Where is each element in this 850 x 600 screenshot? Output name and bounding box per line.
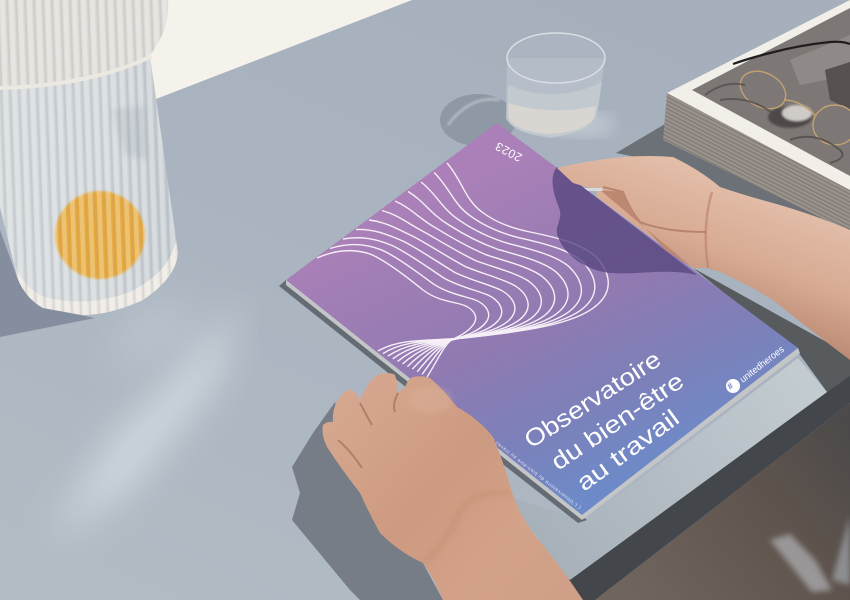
left lens xyxy=(734,64,792,116)
slit of light between fingers xyxy=(584,188,603,191)
year: 2023 xyxy=(493,139,524,165)
title line 1: Observatoire xyxy=(520,346,666,454)
lens shadow right xyxy=(790,137,842,163)
light reflection on table xyxy=(50,290,240,540)
title xyxy=(520,346,689,497)
page stack lines xyxy=(663,93,850,232)
eyeglasses xyxy=(705,42,850,163)
shadow beside book xyxy=(616,124,850,260)
shadow highlights xyxy=(448,99,500,125)
wrist shading xyxy=(423,493,512,563)
logo xyxy=(725,344,787,393)
jar lower body xyxy=(0,56,178,315)
jar rim xyxy=(0,56,152,88)
hand and wrist xyxy=(322,373,583,600)
glass reflection xyxy=(555,113,615,137)
book with glasses xyxy=(663,0,850,232)
photo flowers xyxy=(768,105,812,128)
jar dark reflection xyxy=(112,105,148,160)
photo dark folds xyxy=(825,62,850,110)
bridge xyxy=(784,100,815,115)
trouser fabric xyxy=(595,403,850,600)
brochure page edge xyxy=(286,280,800,520)
jar upper body xyxy=(0,0,168,90)
book cover frame xyxy=(667,0,850,190)
logo wordmark: unitedheroes xyxy=(738,344,787,385)
page stack xyxy=(663,93,850,232)
logo badge xyxy=(726,379,740,393)
table edge band xyxy=(568,375,850,600)
wave lines xyxy=(317,163,608,377)
dark shadow beside arm xyxy=(693,268,850,392)
shadow under brochure xyxy=(279,280,587,523)
logo mark: # xyxy=(725,381,735,392)
second light patch xyxy=(832,515,850,585)
right lens xyxy=(813,105,850,145)
brochure xyxy=(286,123,800,520)
lens shadow left xyxy=(705,84,775,115)
water xyxy=(507,82,602,137)
jar base ring xyxy=(15,240,178,315)
dark blossom xyxy=(768,106,812,128)
jar shadow xyxy=(0,230,95,337)
photo light cloth xyxy=(790,35,850,85)
temple arm xyxy=(733,42,850,64)
wall background xyxy=(140,0,412,100)
palm shade xyxy=(600,190,693,268)
arm and hand xyxy=(557,156,850,360)
glass shadow xyxy=(440,94,516,146)
light blossom xyxy=(782,105,812,121)
title line 3: au travail xyxy=(572,404,685,497)
light patch on trousers xyxy=(770,534,832,592)
lower hand xyxy=(322,373,583,600)
knuckle highlight xyxy=(408,386,452,414)
book photo xyxy=(692,8,850,176)
glass jar xyxy=(0,0,178,337)
drinking glass xyxy=(440,33,615,146)
trousers xyxy=(595,403,850,600)
lower hand shadow xyxy=(292,402,443,600)
hand shadow on cover xyxy=(553,167,697,275)
pale tray under brochure xyxy=(505,358,827,580)
jar ribs xyxy=(0,0,178,315)
title line 2: du bien-être xyxy=(546,367,689,476)
brochure cover xyxy=(286,123,798,515)
footer small print: ( L'Observatoire du bien-être au travail 2023 xyxy=(482,430,582,510)
wrist crease xyxy=(706,192,712,268)
palm fold xyxy=(603,187,706,232)
upper hand and forearm xyxy=(557,156,850,360)
glass body xyxy=(506,58,605,138)
glass rim xyxy=(507,33,605,83)
finger creases xyxy=(338,393,398,468)
lemon xyxy=(55,191,145,279)
water bottom xyxy=(508,103,596,134)
